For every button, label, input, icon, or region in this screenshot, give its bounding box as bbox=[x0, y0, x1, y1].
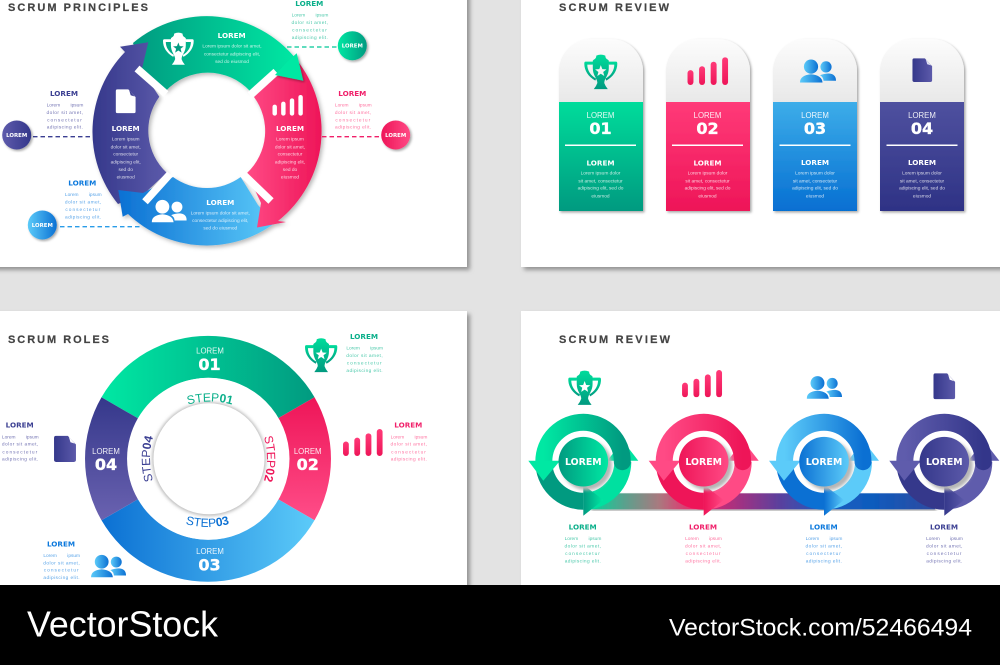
arrow head: left bbox=[769, 461, 801, 481]
body text: adipiscing elit. bbox=[43, 575, 80, 581]
arrow head: bottom bbox=[944, 485, 964, 516]
brand name: VectorStock bbox=[27, 604, 219, 644]
body text: sed do bbox=[118, 167, 133, 173]
dashed connector bbox=[33, 136, 92, 138]
body text: Lorem ipsum bbox=[2, 434, 39, 440]
dashed connector bbox=[287, 46, 337, 48]
body text: dolor sit amet, bbox=[806, 544, 842, 550]
step text: green bbox=[565, 522, 601, 565]
heading: scrum review: SCRUM REVIEW bbox=[559, 2, 670, 14]
dashed connector bbox=[60, 226, 142, 228]
segment 04 bbox=[85, 397, 138, 520]
callout: pink bbox=[322, 89, 410, 150]
card 03 bbox=[773, 39, 857, 211]
body text: Lorem ipsum dolor sit amet, bbox=[202, 44, 262, 50]
body text: eiusmod bbox=[698, 193, 717, 199]
curved step labels bbox=[142, 393, 276, 528]
label: LOREM bbox=[693, 158, 722, 167]
centre label: LOREM bbox=[806, 457, 842, 468]
badge bbox=[381, 120, 410, 150]
body text: eiusmod bbox=[281, 174, 299, 180]
inner shadow ring bbox=[152, 402, 266, 516]
arrow head: left bbox=[649, 461, 680, 481]
ring content: pink bbox=[272, 95, 305, 180]
inner centre disc bbox=[154, 403, 264, 514]
body text: Lorem ipsum dolor sit amet, bbox=[191, 210, 250, 216]
body text: consectetur bbox=[806, 551, 842, 557]
callout: people bbox=[43, 539, 126, 581]
body text: Lorem ipsum bbox=[391, 434, 427, 440]
icon: bars bbox=[682, 370, 722, 397]
number label: LOREM bbox=[801, 111, 829, 120]
card background bbox=[666, 39, 750, 211]
segment 03 bbox=[102, 499, 314, 582]
step text: purple bbox=[926, 522, 963, 565]
icon: trophy bbox=[163, 33, 194, 65]
arrow head: right bbox=[848, 441, 879, 461]
body text: adipiscing elit. bbox=[2, 457, 39, 463]
badge bbox=[28, 210, 57, 240]
white backing bbox=[911, 429, 977, 495]
body text: dolor sit amet, bbox=[65, 200, 102, 206]
step text: blue bbox=[806, 522, 842, 565]
label: LOREM bbox=[276, 124, 304, 133]
body text: consectetur bbox=[686, 551, 721, 557]
icon: people bbox=[807, 376, 842, 399]
arrow: lower right bbox=[824, 462, 864, 501]
segment text 03 bbox=[196, 547, 224, 574]
step 02: STEP 02 bbox=[264, 436, 276, 482]
badge text: LOREM bbox=[385, 133, 406, 139]
body text: Lorem ipsum dolor bbox=[795, 171, 835, 177]
callout: green bbox=[287, 0, 367, 60]
body text: sit amet, consectetur bbox=[900, 178, 945, 184]
body text: adipiscing elit, sed do bbox=[685, 186, 731, 192]
centre label: LOREM bbox=[685, 457, 722, 468]
body text: consectetur bbox=[113, 152, 138, 158]
arrow head: left bbox=[528, 461, 560, 481]
step 01: STEP01 bbox=[187, 393, 232, 404]
label: LOREM bbox=[92, 447, 120, 456]
number: 04 bbox=[911, 119, 933, 138]
body text: dolor sit amet, bbox=[2, 442, 39, 448]
arrow: lower left bbox=[664, 462, 704, 501]
body text: Lorem ipsum bbox=[685, 536, 722, 542]
body text: sit amet, consectetur bbox=[793, 178, 838, 184]
ring content: blue bbox=[152, 198, 250, 232]
arrow head: left bbox=[889, 461, 921, 481]
body text: dolor sit amet, bbox=[565, 544, 601, 550]
icon: bars bbox=[343, 429, 383, 456]
body text: sed do bbox=[283, 167, 298, 173]
label: LOREM bbox=[196, 346, 224, 356]
body text: dolor sit amet, bbox=[275, 144, 305, 150]
arrow: lower right bbox=[944, 462, 984, 501]
arrow: top bbox=[905, 422, 983, 462]
segment 02 bbox=[278, 397, 331, 520]
body text: dolor sit amet, bbox=[335, 110, 372, 116]
arrow: lower left bbox=[544, 462, 583, 501]
number: 03 bbox=[198, 556, 221, 574]
icon: trophy bbox=[568, 371, 601, 405]
step text: pink bbox=[685, 522, 722, 565]
dashed connector bbox=[322, 136, 380, 138]
body text: adipiscing elit. bbox=[565, 559, 601, 565]
heading: scrum roles: SCRUM ROLES bbox=[8, 334, 109, 346]
body text: consectetur bbox=[391, 449, 427, 455]
arrow segment: blue bbox=[118, 177, 275, 245]
panel: scrum principles bbox=[0, 0, 467, 267]
circular arrow ring bbox=[92, 16, 322, 245]
body text: sed do eiusmod bbox=[203, 226, 238, 232]
centre disc bbox=[799, 437, 849, 486]
body text: dolor sit amet, bbox=[47, 110, 83, 116]
cycle 1: green bbox=[528, 422, 638, 516]
body text: consectetur adipiscing elit, bbox=[192, 218, 248, 224]
body text: Lorem ipsum bbox=[65, 192, 102, 198]
inner white disc bbox=[128, 378, 290, 540]
body text: consectetur bbox=[2, 449, 38, 455]
body text: eiusmod bbox=[913, 193, 931, 199]
body text: adipiscing elit. bbox=[806, 559, 842, 565]
panel: scrum roles bbox=[0, 311, 472, 585]
disc shadow bbox=[923, 440, 973, 490]
white separators bbox=[137, 68, 276, 202]
badge text: LOREM bbox=[6, 133, 27, 139]
disc shadow bbox=[802, 440, 852, 490]
body text: Lorem ipsum bbox=[565, 536, 601, 542]
body text: consectetur bbox=[335, 117, 371, 123]
arrow segment: green body bbox=[133, 16, 296, 91]
arrow segment: purple bbox=[92, 42, 167, 204]
label: LOREM bbox=[569, 522, 597, 531]
body text: consectetur bbox=[47, 117, 83, 123]
arrow: lower right bbox=[583, 462, 623, 501]
badge text: LOREM bbox=[342, 44, 363, 50]
body text: adipiscing elit. bbox=[292, 35, 328, 41]
arrow: lower left bbox=[905, 462, 944, 501]
body text: adipiscing elit, sed do bbox=[792, 186, 838, 192]
arrow: top bbox=[784, 422, 863, 462]
white backing bbox=[791, 429, 857, 495]
panel 2 card bbox=[521, 0, 1000, 267]
label: LOREM bbox=[47, 539, 75, 548]
callout: purple bbox=[2, 89, 92, 150]
arrow: lower right bbox=[704, 462, 743, 501]
number: 04 bbox=[95, 455, 117, 474]
centre label: LOREM bbox=[565, 457, 602, 468]
number label: LOREM bbox=[694, 111, 721, 120]
label: LOREM bbox=[801, 158, 829, 167]
centre label: LOREM bbox=[926, 457, 963, 468]
step 04: STEP04 bbox=[142, 436, 153, 482]
step 03: STEP03 bbox=[186, 516, 229, 528]
icon: trophy bbox=[584, 55, 617, 89]
body text: dolor sit amet, bbox=[391, 442, 427, 448]
label: LOREM bbox=[6, 421, 34, 430]
number: 03 bbox=[804, 119, 826, 138]
label: LOREM bbox=[930, 522, 958, 531]
watermark footer bar bbox=[0, 585, 1000, 665]
donut chart bbox=[85, 336, 331, 582]
card 02 bbox=[666, 39, 750, 211]
panel: scrum review cards bbox=[521, 0, 1000, 267]
centre disc bbox=[558, 437, 608, 486]
divider bbox=[886, 144, 958, 146]
body text: adipiscing elit. bbox=[346, 368, 383, 374]
body text: consectetur adipiscing elit, bbox=[204, 51, 260, 57]
arrow: lower left bbox=[784, 462, 824, 501]
heading: scrum principles: SCRUM PRINCIPLES bbox=[8, 2, 148, 14]
body text: dolor sit amet, bbox=[111, 144, 141, 150]
body text: dolor sit amet, bbox=[685, 544, 722, 550]
panel: scrum review timeline bbox=[521, 311, 1000, 611]
card background bbox=[880, 39, 964, 211]
body text: dolor sit amet, bbox=[292, 20, 328, 26]
body text: eiusmod bbox=[117, 174, 135, 180]
badge text: LOREM bbox=[32, 223, 53, 229]
body text: Lorem ipsum bbox=[112, 137, 140, 143]
arrow segment: pink bbox=[247, 59, 322, 228]
divider bbox=[565, 144, 636, 146]
body text: adipiscing elit. bbox=[685, 559, 722, 565]
arrow head: bottom bbox=[583, 485, 603, 516]
body text: dolor sit amet, bbox=[346, 353, 383, 359]
divider bbox=[780, 144, 850, 146]
arrow head: right bbox=[607, 441, 638, 461]
arrow: top bbox=[544, 422, 622, 462]
body text: adipiscing elit. bbox=[47, 125, 83, 131]
card background bbox=[559, 39, 643, 211]
body text: consectetur bbox=[44, 568, 80, 574]
body text: Lorem ipsum bbox=[346, 346, 383, 352]
body text: Lorem ipsum dolor bbox=[581, 171, 621, 177]
body text: adipiscing elit, bbox=[111, 159, 141, 165]
number: 02 bbox=[696, 119, 719, 138]
segment text 04 bbox=[92, 447, 120, 474]
white backing bbox=[671, 429, 737, 495]
label: LOREM bbox=[294, 447, 322, 456]
body text: adipiscing elit. bbox=[926, 559, 963, 565]
label: LOREM bbox=[394, 421, 422, 430]
body text: dolor sit amet, bbox=[43, 560, 80, 566]
arrow head: green bbox=[275, 53, 303, 81]
number label: LOREM bbox=[908, 111, 936, 120]
white backing bbox=[550, 429, 616, 495]
badge bbox=[338, 31, 367, 60]
card 04 bbox=[880, 39, 964, 211]
body text: sed do eiusmod bbox=[215, 59, 249, 65]
label: LOREM bbox=[350, 332, 378, 341]
label: LOREM bbox=[908, 158, 936, 167]
icon: document bbox=[912, 58, 932, 82]
body text: Lorem ipsum bbox=[276, 137, 304, 143]
body text: adipiscing elit, sed do bbox=[899, 186, 945, 192]
number: 01 bbox=[198, 355, 221, 374]
body text: Lorem ipsum dolor bbox=[902, 171, 942, 177]
label: LOREM bbox=[206, 198, 234, 207]
segment text 01 bbox=[196, 346, 224, 374]
number: 01 bbox=[589, 119, 612, 138]
body text: consectetur bbox=[292, 28, 328, 34]
body text: Lorem ipsum dolor bbox=[688, 171, 728, 177]
panel 1 card bbox=[0, 0, 467, 267]
body text: consectetur bbox=[927, 551, 962, 557]
ring content: green bbox=[163, 31, 262, 65]
centre disc bbox=[920, 437, 969, 486]
label: LOREM bbox=[50, 89, 78, 98]
arrow head: bottom bbox=[824, 485, 844, 516]
label: LOREM bbox=[689, 522, 717, 531]
icon: document bbox=[54, 436, 76, 462]
centre disc bbox=[679, 437, 728, 486]
icon: document bbox=[933, 373, 955, 399]
label: LOREM bbox=[586, 158, 615, 167]
ring content: purple bbox=[111, 89, 141, 180]
body text: consectetur bbox=[347, 361, 383, 367]
icon: trophy bbox=[305, 338, 337, 372]
icon: people bbox=[800, 60, 836, 83]
card 01 bbox=[559, 39, 643, 211]
image reference: VectorStock.com/52466494 bbox=[669, 615, 972, 642]
body text: adipiscing elit. bbox=[335, 125, 372, 131]
body text: adipiscing elit. bbox=[65, 214, 102, 220]
body text: Lorem ipsum bbox=[292, 13, 328, 19]
callout: document bbox=[2, 421, 76, 463]
body text: sit amet, consectetur bbox=[685, 178, 730, 184]
body text: consectetur bbox=[278, 152, 303, 158]
body text: sit amet, consectetur bbox=[578, 178, 623, 184]
body text: Lorem ipsum bbox=[926, 536, 963, 542]
callout: trophy bbox=[305, 332, 383, 374]
label: LOREM bbox=[810, 522, 838, 531]
panel 4 card bbox=[521, 311, 1000, 611]
body text: Lorem ipsum bbox=[335, 103, 372, 109]
body text: adipiscing elit. bbox=[391, 457, 427, 463]
cycle 2: pink bbox=[649, 422, 759, 516]
body text: eiusmod bbox=[591, 193, 610, 199]
card background bbox=[773, 39, 857, 211]
panel 3 card bbox=[0, 311, 467, 611]
divider bbox=[672, 144, 743, 146]
body text: Lorem ipsum bbox=[47, 103, 83, 109]
icon: people bbox=[152, 200, 187, 222]
heading: scrum review: SCRUM REVIEW bbox=[559, 334, 671, 346]
arrow head: right bbox=[728, 441, 759, 461]
body text: adipiscing elit, sed do bbox=[578, 186, 624, 192]
number: 02 bbox=[297, 455, 319, 474]
badge bbox=[2, 120, 31, 150]
body text: Lorem ipsum bbox=[43, 553, 80, 559]
body text: eiusmod bbox=[806, 193, 824, 199]
label: LOREM bbox=[68, 179, 96, 188]
black bar bbox=[0, 585, 1000, 665]
label: LOREM bbox=[112, 124, 140, 133]
label: LOREM bbox=[218, 31, 246, 40]
icon: bars bbox=[688, 57, 728, 85]
callout: bars bbox=[343, 421, 427, 463]
label: LOREM bbox=[196, 547, 224, 556]
body text: adipiscing elit, bbox=[275, 159, 305, 165]
body text: consectetur bbox=[565, 551, 601, 557]
body text: consectetur bbox=[65, 207, 101, 213]
callout: blue bbox=[28, 179, 142, 240]
body text: dolor sit amet, bbox=[926, 544, 963, 550]
cycle 4: purple bbox=[889, 422, 999, 516]
arrow head: right bbox=[968, 441, 999, 461]
timeline ribbon bbox=[590, 493, 935, 509]
disc shadow bbox=[562, 440, 612, 490]
arrow head: bottom bbox=[704, 485, 724, 516]
icon: people bbox=[91, 555, 126, 577]
number label: LOREM bbox=[587, 111, 614, 120]
arrow: top bbox=[664, 422, 743, 462]
segment 01 bbox=[102, 336, 314, 418]
body text: Lorem ipsum bbox=[806, 536, 842, 542]
segment text 02 bbox=[294, 447, 322, 474]
cycle 3: blue bbox=[769, 422, 879, 516]
disc shadow bbox=[682, 440, 732, 490]
icon: document bbox=[116, 89, 136, 113]
icon: bars bbox=[272, 95, 303, 116]
label: LOREM bbox=[338, 89, 366, 98]
